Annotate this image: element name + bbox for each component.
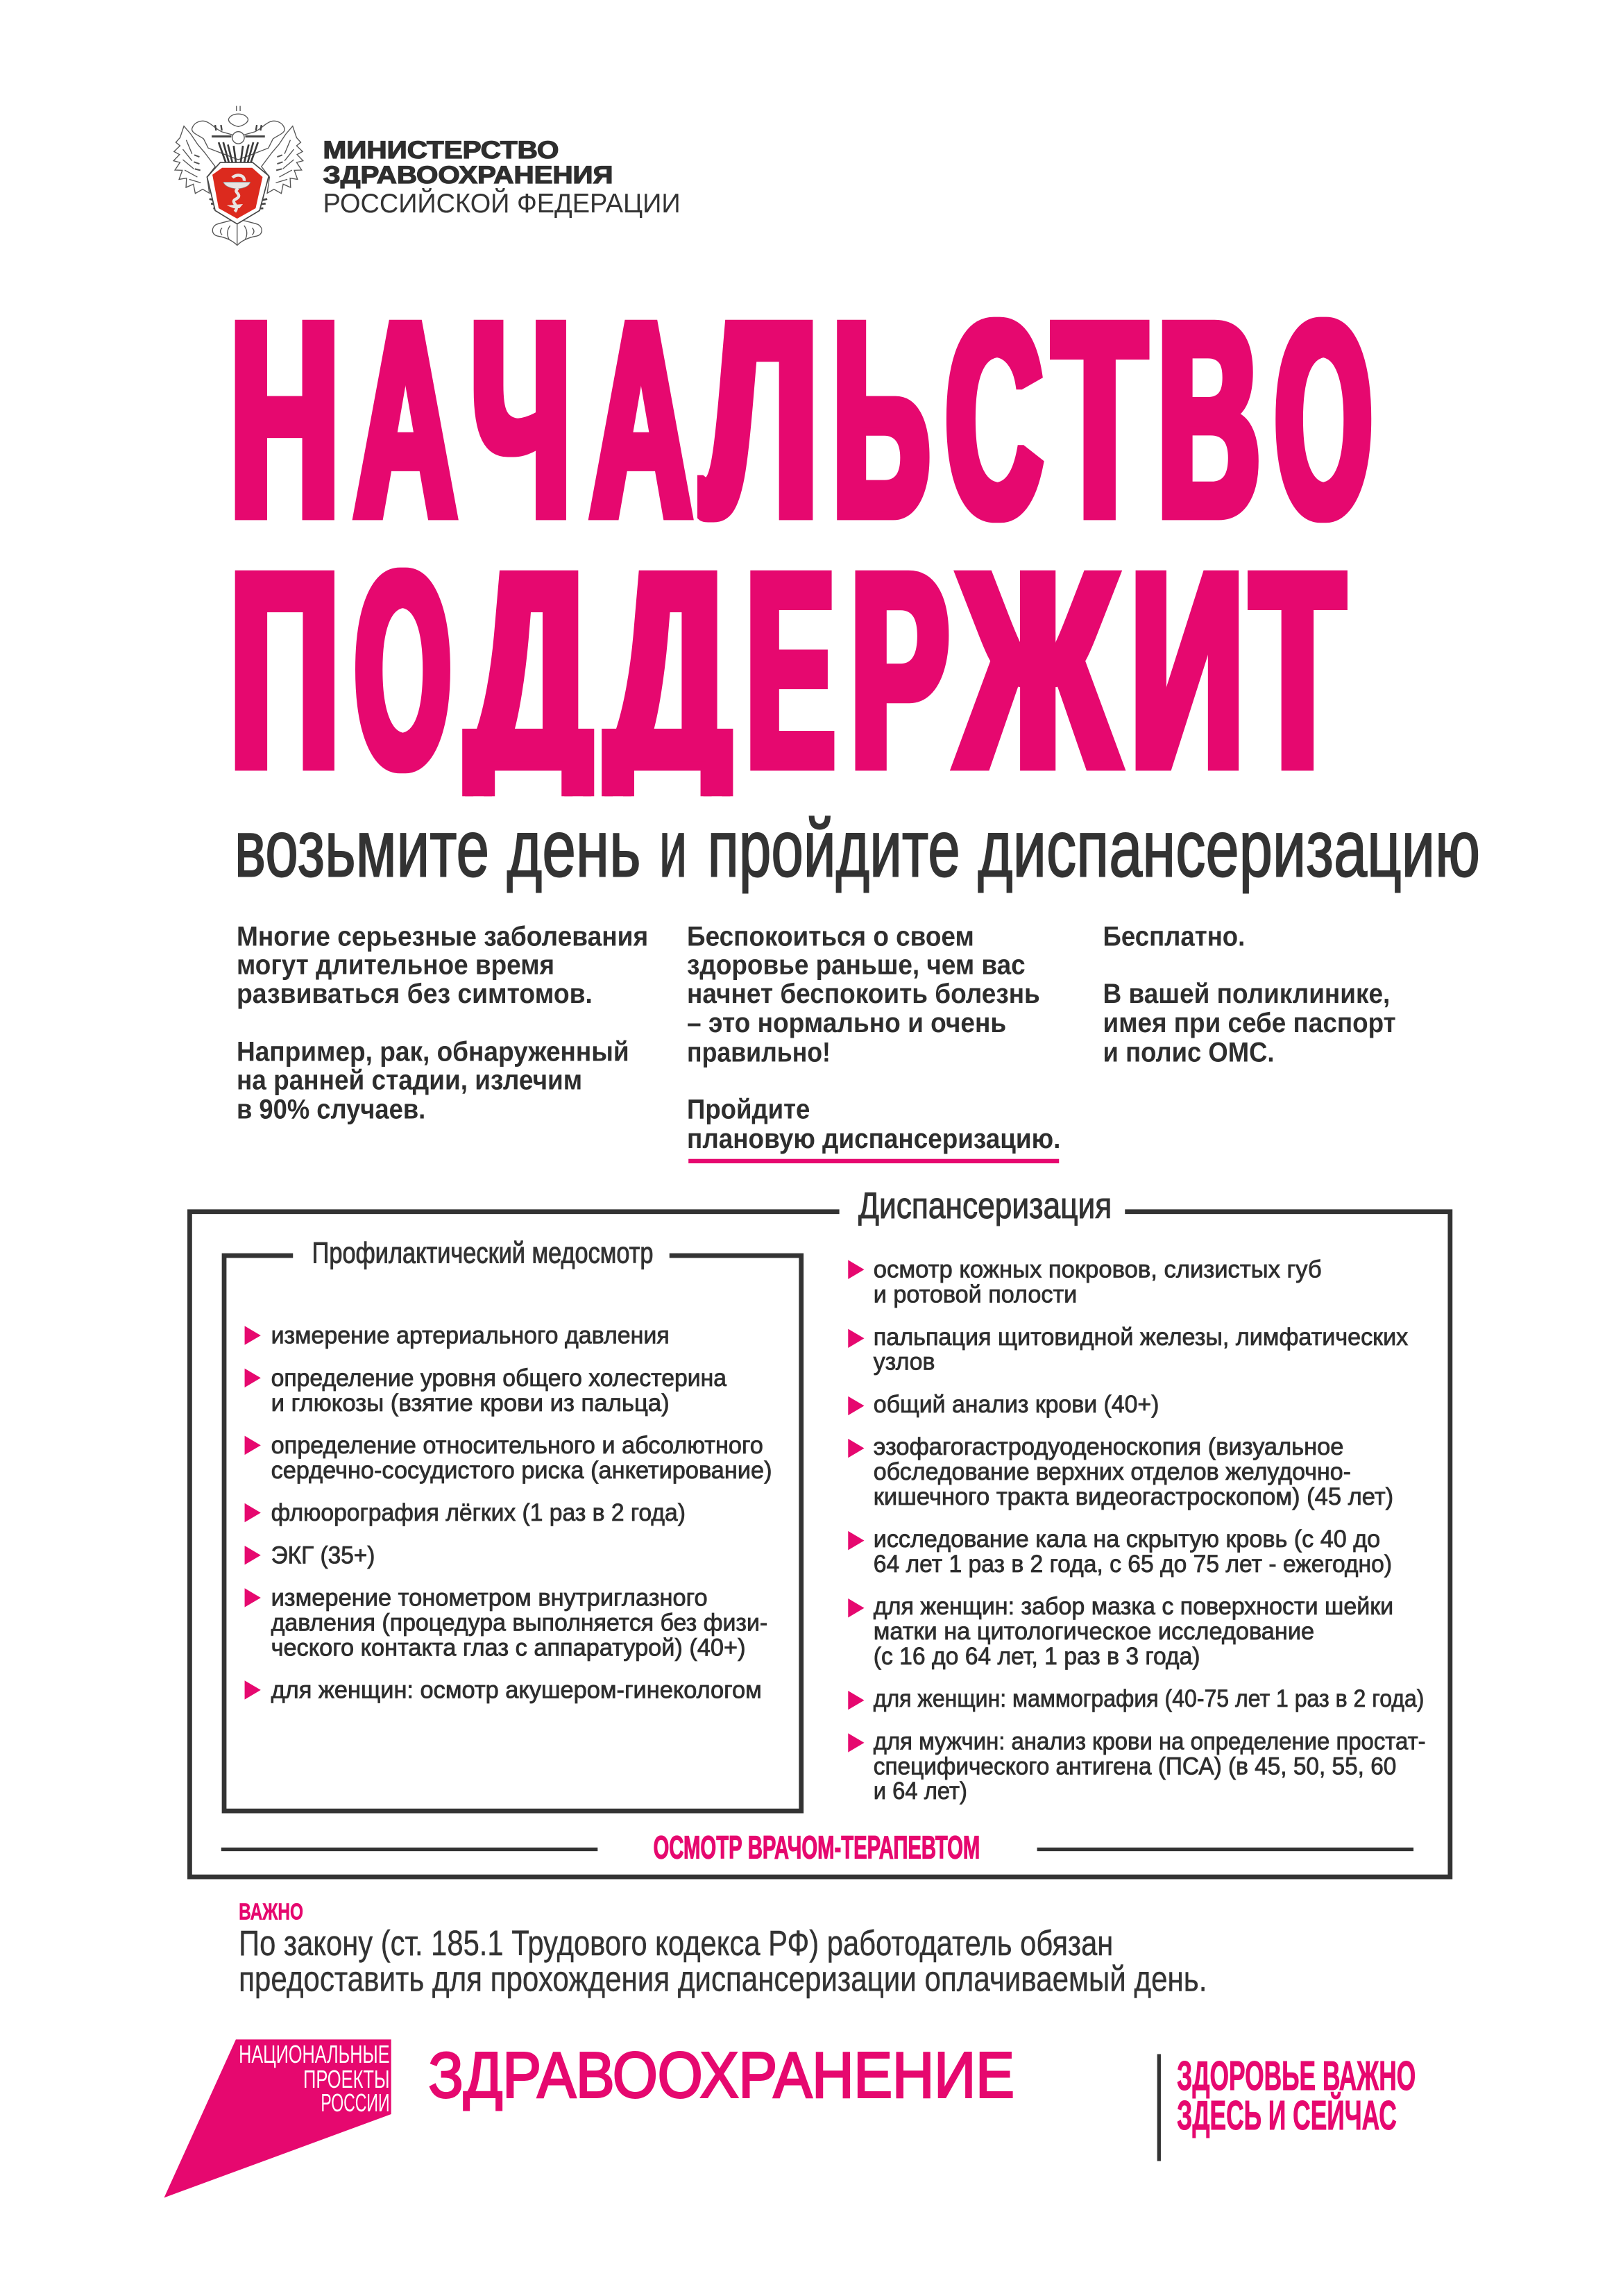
heads and crown	[192, 106, 284, 160]
text column 1: Например, рак, обнаруженный	[237, 1036, 629, 1067]
text column 3: и полис ОМС.	[1103, 1037, 1275, 1067]
left wing	[173, 126, 215, 194]
logo: national projects	[164, 2039, 391, 2197]
ministry name: МИНИСТЕРСТВО	[323, 137, 559, 164]
neck feathers	[219, 142, 258, 163]
important note	[239, 1898, 1207, 1999]
text column 2	[687, 922, 1060, 1163]
heading: dispensary: Диспансеризация	[858, 1185, 1112, 1226]
heading: healthcare project: ЗДРАВООХРАНЕНИЕ	[428, 2039, 1014, 2111]
text column 3: имея при себе паспорт	[1103, 1008, 1396, 1038]
claws	[210, 199, 267, 209]
list: preventive exam items: определение уровня общего холестерина	[271, 1364, 726, 1392]
title: Ь	[833, 264, 929, 575]
text column 2: правильно!	[687, 1037, 831, 1067]
list: dispensary items: для мужчин: анализ крови на определение простат-	[874, 1727, 1426, 1755]
title: В	[1157, 264, 1260, 575]
list: preventive exam items: измерение артериального давления	[271, 1322, 670, 1349]
title: И	[1130, 514, 1244, 825]
panel: dispensary	[189, 1185, 1450, 1877]
logo: national projects: РОССИИ	[321, 2089, 390, 2117]
text column 3: Бесплатно.	[1103, 922, 1245, 952]
logo: national projects: НАЦИОНАЛЬНЫЕ	[239, 2041, 390, 2068]
list: dispensary items: специфического антигена (ПСА) (в 45, 50, 55, 60	[874, 1752, 1396, 1780]
title: Д	[606, 514, 731, 825]
list: dispensary items: 64 лет 1 раз в 2 года, с 65 до 75 лет - ежегодно)	[874, 1550, 1392, 1578]
list: dispensary items: эзофагогастродуоденоскопия (визуальное	[874, 1433, 1343, 1460]
slogan: ЗДЕСЬ И СЕЙЧАС	[1177, 2092, 1397, 2138]
panel: preventive exam	[224, 1237, 801, 1811]
divider line	[1157, 2054, 1161, 2161]
text column 2: начнет беспокоить болезнь	[687, 979, 1040, 1009]
title: Н	[230, 264, 339, 575]
text column 1	[237, 922, 648, 1125]
subtitle: пройдите	[708, 803, 960, 893]
subtitle: возьмите	[235, 803, 489, 893]
subtitle: день	[507, 803, 641, 893]
list: dispensary items: узлов	[874, 1348, 935, 1376]
text: О	[1275, 264, 1372, 575]
list: dispensary items: исследование кала на скрытую кровь (с 40 до	[874, 1525, 1380, 1553]
text column 1: в 90% случаев.	[237, 1095, 425, 1125]
right wing	[262, 126, 303, 194]
important note: предоставить для прохождения диспансеризации оплачиваемый день.	[239, 1959, 1207, 1999]
list: preventive exam items: сердечно-сосудистого риска (анкетирование)	[271, 1456, 772, 1484]
subtitle: и	[659, 803, 687, 893]
text column 2: – это нормально и очень	[687, 1008, 1006, 1038]
text column 2: Пройдите	[687, 1095, 810, 1125]
shield	[207, 162, 269, 224]
footer of panel: therapist exam: ОСМОТР ВРАЧОМ-ТЕРАПЕВТОМ	[654, 1830, 980, 1866]
text column 1: на ранней стадии, излечим	[237, 1065, 582, 1095]
title	[235, 316, 1371, 797]
title: Л	[702, 264, 819, 575]
text column 3: В вашей поликлинике,	[1103, 979, 1390, 1009]
text column 2: здоровье раньше, чем вас	[687, 950, 1026, 981]
ministry name	[323, 137, 681, 219]
list: preventive exam items: ЭКГ (35+)	[271, 1541, 375, 1569]
list: dispensary items: кишечного тракта видеогастроскопом) (45 лет)	[874, 1483, 1393, 1510]
list: dispensary items: пальпация щитовидной железы, лимфатических	[874, 1323, 1409, 1351]
footer of panel: therapist exam	[221, 1830, 1413, 1866]
list: dispensary items: обследование верхних отделов желудочно-	[874, 1458, 1351, 1485]
list: dispensary items: (с 16 до 64 лет, 1 раз в 3 года)	[874, 1642, 1200, 1670]
title: Ж	[955, 514, 1121, 825]
icon: ministry emblem	[173, 106, 303, 245]
tail	[212, 219, 262, 245]
list: dispensary items: осмотр кожных покровов, слизистых губ	[874, 1256, 1322, 1283]
list: dispensary items	[848, 1256, 1426, 1805]
list: dispensary items: и ротовой полости	[874, 1281, 1077, 1308]
list: preventive exam items: ческого контакта глаз с аппаратурой) (40+)	[271, 1633, 746, 1661]
title: Т	[1053, 264, 1146, 575]
title: Ч	[471, 264, 570, 575]
bowl and snake	[223, 175, 250, 212]
important note: По закону (ст. 185.1 Трудового кодекса РФ) работодатель обязан	[239, 1923, 1113, 1963]
list: dispensary items: для женщин: маммография (40-75 лет 1 раз в 2 года)	[874, 1685, 1424, 1712]
title: А	[590, 264, 692, 575]
list: dispensary items: для женщин: забор мазка с поверхности шейки	[874, 1592, 1393, 1620]
title: Е	[747, 514, 835, 825]
title: П	[230, 514, 339, 825]
text column 1: могут длительное время	[237, 950, 554, 981]
list: dispensary items: матки на цитологическое исследование	[874, 1617, 1314, 1645]
text column 2: плановую диспансеризацию.	[687, 1124, 1060, 1154]
logo: national projects: ПРОЕКТЫ	[303, 2066, 390, 2093]
list: preventive exam items: флюорография лёгких (1 раз в 2 года)	[271, 1499, 686, 1526]
list: dispensary items: общий анализ крови (40+)	[874, 1390, 1159, 1418]
title: А	[355, 264, 457, 575]
list: preventive exam items: давления (процедура выполняется без физи-	[271, 1608, 767, 1636]
list: dispensary items: и 64 лет)	[874, 1777, 967, 1805]
text column 3	[1103, 922, 1396, 1067]
text column 1: Многие серьезные заболевания	[237, 922, 648, 952]
text column 2: Беспокоиться о своем	[687, 922, 974, 952]
list: preventive exam items: для женщин: осмотр акушером-гинекологом	[271, 1676, 762, 1704]
heading: preventive exam: Профилактический медосмотр	[312, 1237, 654, 1269]
list: preventive exam items: определение относительного и абсолютного	[271, 1431, 763, 1459]
list: preventive exam items: измерение тонометром внутриглазного	[271, 1584, 708, 1612]
slogan	[1177, 2052, 1416, 2138]
important note: ВАЖНО	[239, 1898, 303, 1925]
title: Т	[1251, 514, 1344, 825]
title: Д	[466, 514, 592, 825]
text column 1: развиваться без симтомов.	[237, 979, 593, 1009]
title: О	[355, 514, 451, 825]
ministry name: ЗДРАВООХРАНЕНИЯ	[323, 162, 613, 189]
title: Р	[851, 514, 949, 825]
ministry name: РОССИЙСКОЙ ФЕДЕРАЦИИ	[323, 187, 681, 219]
list: preventive exam items	[245, 1322, 772, 1704]
list: preventive exam items: и глюкозы (взятие крови из пальца)	[271, 1389, 670, 1417]
title: С	[946, 264, 1042, 575]
slogan: ЗДОРОВЬЕ ВАЖНО	[1177, 2052, 1416, 2099]
